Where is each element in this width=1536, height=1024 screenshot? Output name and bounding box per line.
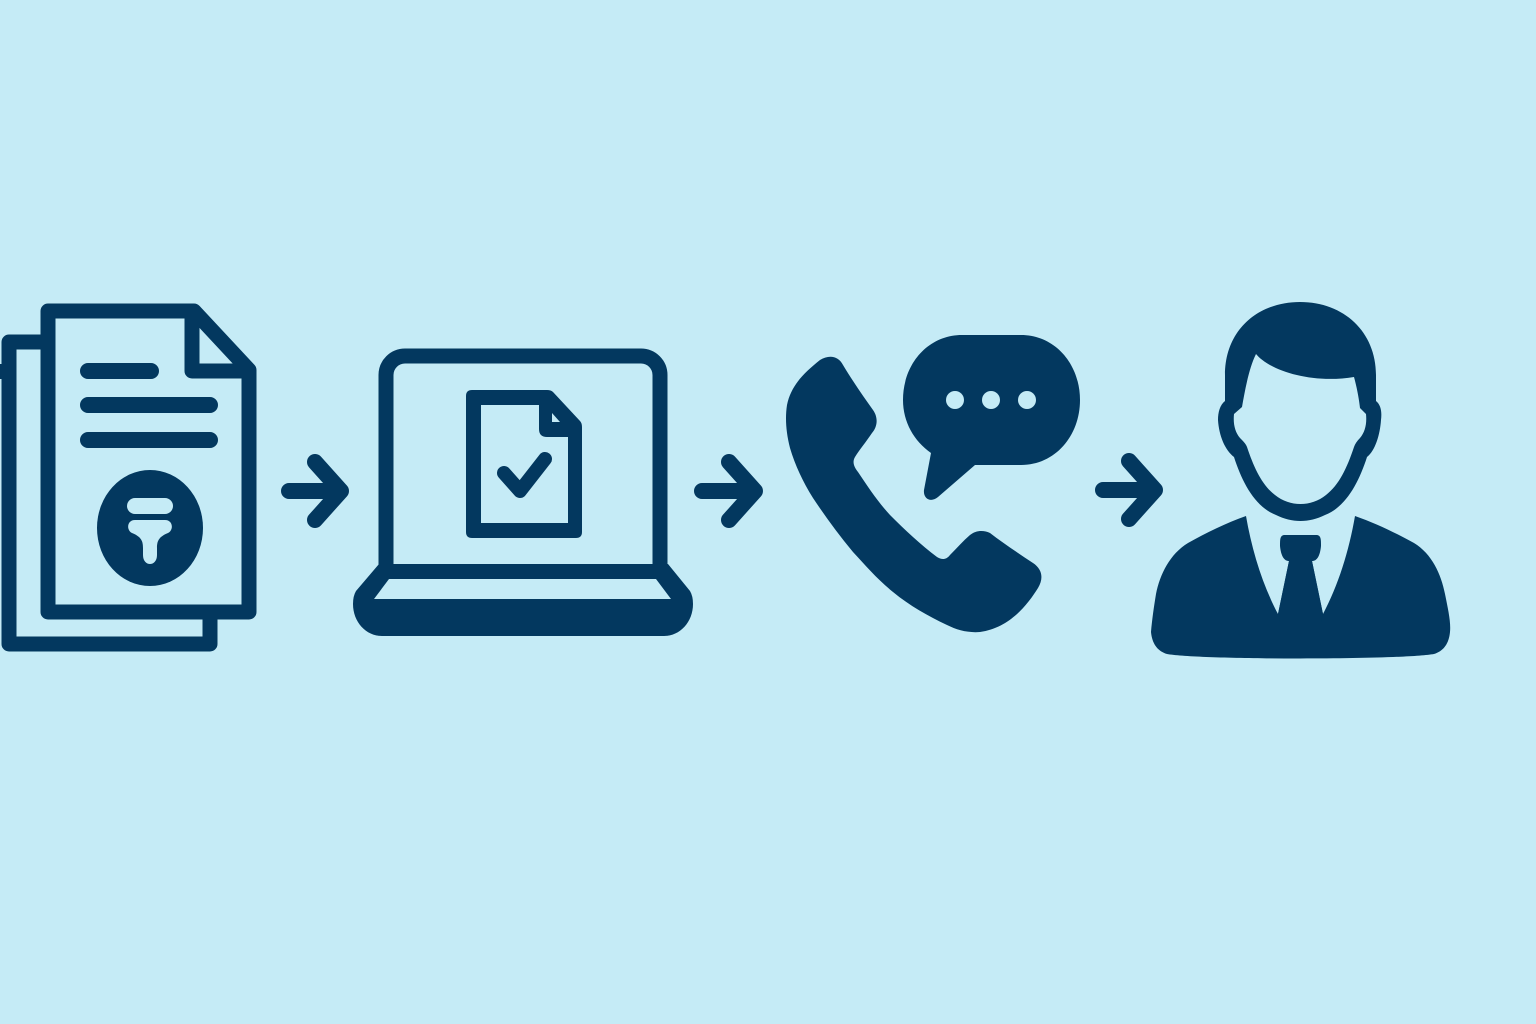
arrow 3	[1103, 461, 1155, 519]
arrow 1	[289, 462, 341, 520]
icon: documents with filter	[0, 311, 249, 644]
icon: laptop with checked document	[353, 356, 693, 636]
icon: businessman	[1151, 302, 1450, 658]
icon: speech bubble	[903, 335, 1080, 500]
arrow 2	[702, 462, 755, 520]
icon: telephone handset	[786, 357, 1041, 632]
icon: telephone handset with speech bubble	[786, 335, 1080, 632]
